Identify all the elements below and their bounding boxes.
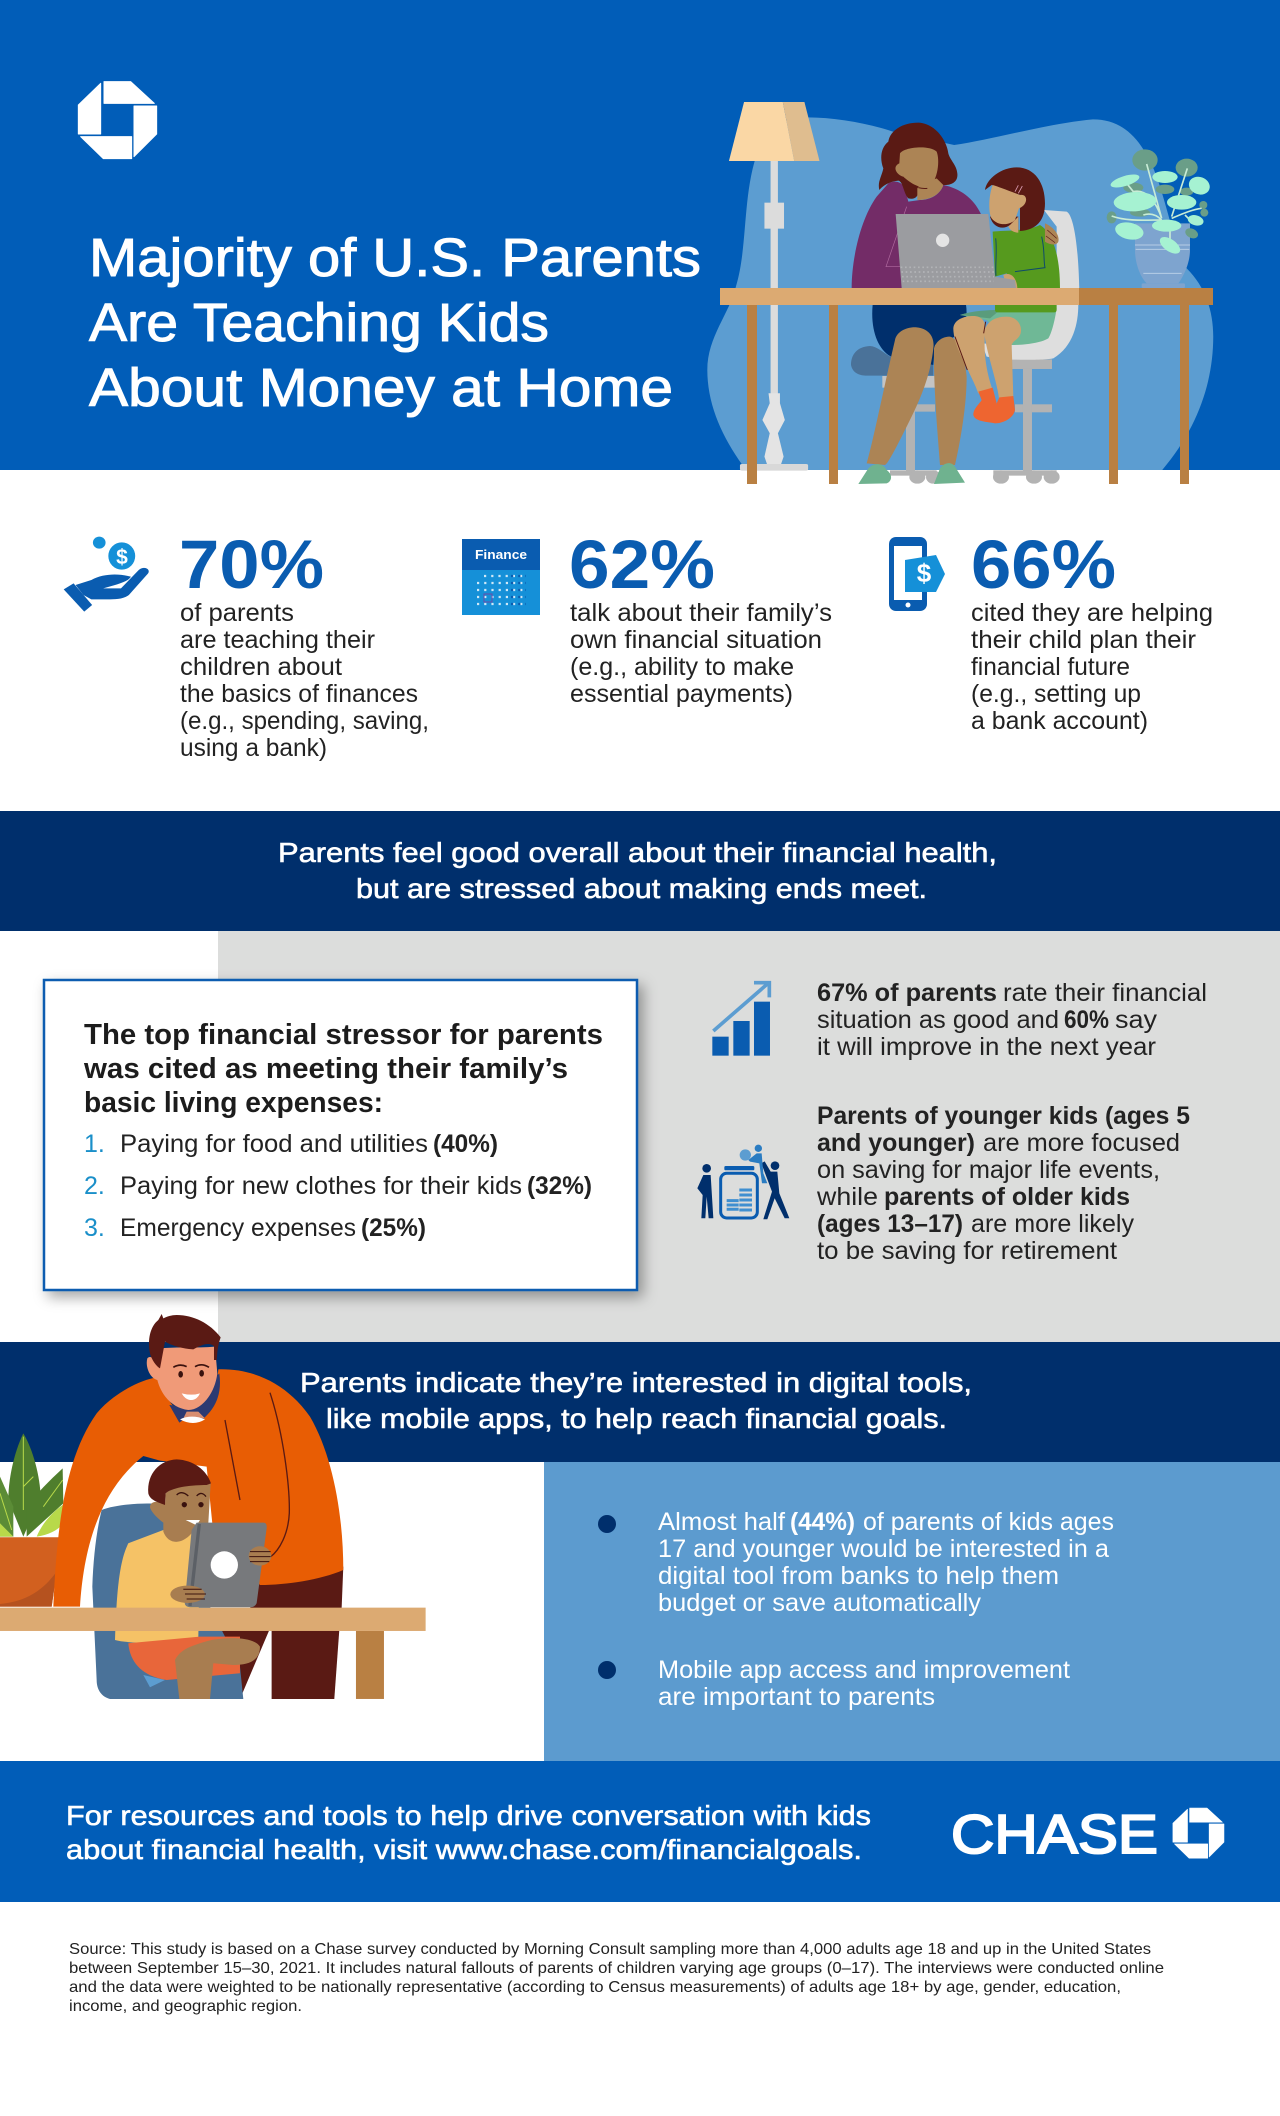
banner: financial health: but are stressed about making ends meet. — [356, 873, 927, 904]
text: almost half of parents: of parents of kids ages — [863, 1508, 1114, 1536]
icon: rising bar chart — [712, 983, 770, 1056]
text: parents rate financial situation: 67% of parents — [817, 979, 997, 1007]
text: almost half of parents: Almost half — [658, 1508, 785, 1536]
text: parents rate financial situation: it will improve in the next year — [817, 1033, 1156, 1061]
panel: digital tool bullets — [544, 1462, 1280, 1761]
text: resources call to action — [66, 1800, 871, 1865]
legs of mother and daughter — [858, 303, 1057, 484]
text: parents of younger and older kids: on saving for major life events, — [817, 1156, 1160, 1184]
source note: income, and geographic region. — [69, 1998, 302, 2015]
text: almost half of parents: (44%) — [790, 1508, 855, 1536]
text: mobile app access — [658, 1656, 1070, 1711]
title: Majority of U.S. Parents — [89, 228, 701, 288]
panel: top financial stressor: (32%) — [527, 1172, 592, 1200]
text: parents of younger and older kids: parents of older kids — [884, 1183, 1130, 1211]
laptop — [896, 214, 1016, 288]
desk legs — [747, 305, 1189, 484]
panel: call to action footer — [0, 1761, 1280, 1902]
source note: between September 15–30, 2021. It includes natural fallouts of parents of children varying age groups (0–17). The interviews were conducted online — [69, 1960, 1164, 1977]
stat: 66 percent: their child plan their — [971, 626, 1196, 654]
desk top — [720, 288, 1213, 305]
father body — [53, 1369, 343, 1699]
panel: top financial stressor — [44, 980, 637, 1290]
text: parents of younger and older kids: to be saving for retirement — [817, 1237, 1117, 1265]
stat: 62 percent: own financial situation — [570, 626, 822, 654]
potted plant — [0, 1433, 76, 1607]
stat: 70 percent: of parents — [180, 599, 294, 627]
stat: 70 percent: (e.g., spending, saving, — [180, 707, 429, 735]
stat: 66 percent — [889, 526, 1213, 735]
panel: header — [0, 0, 1280, 470]
illustration: father and son with tablet — [0, 1314, 426, 1699]
stat: 70 percent: $ — [116, 546, 128, 569]
text: almost half of parents: 17 and younger would be interested in a — [658, 1535, 1109, 1563]
text: almost half of parents — [658, 1508, 1114, 1617]
illustration: mother and daughter at desk — [707, 102, 1213, 484]
stat: 70 percent — [64, 526, 429, 762]
banner: digital tools — [0, 1342, 1280, 1462]
title: Are Teaching Kids — [89, 293, 549, 353]
panel: top financial stressor: Paying for food and utilities — [120, 1130, 428, 1158]
panel: top financial stressor: (40%) — [433, 1130, 498, 1158]
stat: 62 percent: essential payments) — [570, 680, 793, 708]
icon: phone with dollar — [889, 537, 945, 611]
text: parents rate financial situation — [817, 979, 1207, 1061]
upper body of mother — [852, 123, 993, 288]
stat: 62 percent: talk about their family’s — [570, 599, 832, 627]
text: parents of younger and older kids: are more focused — [983, 1129, 1180, 1157]
upper body of daughter — [985, 167, 1060, 288]
stat: 70 percent: the basics of finances — [180, 680, 418, 708]
stat: 66 percent: 66% — [971, 526, 1116, 603]
text: parents rate financial situation: situation as good and — [817, 1006, 1059, 1034]
text: almost half of parents: digital tool from banks to help them — [658, 1562, 1059, 1590]
father head — [147, 1314, 221, 1423]
panel: top financial stressor: 3. — [84, 1214, 105, 1242]
text: parents of younger and older kids: are more likely — [971, 1210, 1134, 1238]
stat: 62 percent — [462, 526, 832, 708]
stat: 70 percent: 70% — [179, 526, 324, 603]
text: parents of younger and older kids: while — [816, 1183, 878, 1211]
icon: finance calendar — [462, 539, 540, 615]
banner: digital tools: like mobile apps, to help reach financial goals. — [326, 1403, 947, 1434]
panel: top financial stressor: was cited as meeting their family’s — [83, 1053, 568, 1085]
bullet one — [598, 1515, 616, 1533]
icon: finance calendar: Finance — [475, 547, 527, 562]
icon: phone with dollar: $ — [917, 558, 932, 588]
panel: gray background — [218, 931, 1280, 1342]
chair back — [1044, 210, 1079, 290]
stat: 70 percent: children about — [180, 653, 342, 681]
icon: people saving coins in a jar — [697, 1145, 789, 1219]
banner: financial health: Parents feel good overall about their financial health, — [278, 837, 997, 868]
panel: top financial stressor: (25%) — [361, 1214, 426, 1242]
plant in vase — [1107, 149, 1212, 288]
text: almost half of parents: budget or save automatically — [658, 1589, 981, 1617]
desk — [0, 1608, 426, 1699]
panel: top financial stressor: 1. — [84, 1130, 105, 1158]
son in chair — [92, 1459, 271, 1699]
panel: top financial stressor: The top financial stressor for parents — [84, 1019, 603, 1051]
banner: digital tools: Parents indicate they’re interested in digital tools, — [300, 1367, 972, 1398]
text: parents of younger and older kids: (ages 13–17) — [817, 1210, 963, 1238]
stat: 66 percent: a bank account) — [971, 707, 1148, 735]
stat: 70 percent: using a bank) — [180, 734, 327, 762]
icon: hand holding coin — [64, 537, 149, 612]
text: parents of younger and older kids: Parents of younger kids (ages 5 — [817, 1102, 1190, 1130]
text: parents rate financial situation: say — [1115, 1006, 1158, 1034]
banner: financial health — [0, 811, 1280, 931]
icon: Chase logo small — [1173, 1808, 1224, 1858]
office chair — [851, 305, 1078, 484]
stat: 62 percent: (e.g., ability to make — [570, 653, 794, 681]
bullet two — [598, 1661, 616, 1679]
text: parents of younger and older kids — [816, 1102, 1190, 1265]
stat: 70 percent: are teaching their — [180, 626, 375, 654]
stat: 66 percent: (e.g., setting up — [971, 680, 1141, 708]
panel: top financial stressor: Paying for new clothes for their kids — [120, 1172, 522, 1200]
title — [89, 228, 701, 418]
source note: and the data were weighted to be nationally representative (according to Census measurements) of adults age 18+ by age, gender, education, — [69, 1979, 1121, 1996]
text: mobile app access: Mobile app access and improvement — [658, 1656, 1070, 1684]
text: parents rate financial situation: 60% — [1064, 1006, 1109, 1034]
source note: Source: This study is based on a Chase survey conducted by Morning Consult sampling more than 4,000 adults age 18 and up in the United States — [69, 1941, 1151, 1958]
text: parents of younger and older kids: and younger) — [817, 1129, 975, 1157]
Chase wordmark: CHASE — [951, 1803, 1158, 1865]
text: mobile app access: are important to parents — [658, 1683, 935, 1711]
title: About Money at Home — [89, 358, 673, 418]
panel: top financial stressor: basic living expenses: — [84, 1087, 383, 1119]
text: parents rate financial situation: rate their financial — [1003, 979, 1207, 1007]
stat: 62 percent: 62% — [569, 526, 715, 603]
icon: Chase octagon logo — [78, 82, 157, 159]
lamp — [729, 102, 820, 471]
panel: top financial stressor: 2. — [84, 1172, 105, 1200]
text: resources call to action: For resources and tools to help drive conversation with kids — [66, 1800, 871, 1831]
stat: 66 percent: financial future — [971, 653, 1130, 681]
panel: top financial stressor: Emergency expenses — [120, 1214, 356, 1242]
source note — [69, 1941, 1164, 2015]
text: resources call to action: about financial health, visit www.chase.com/financialgoals. — [66, 1834, 862, 1865]
stat: 66 percent: cited they are helping — [971, 599, 1213, 627]
